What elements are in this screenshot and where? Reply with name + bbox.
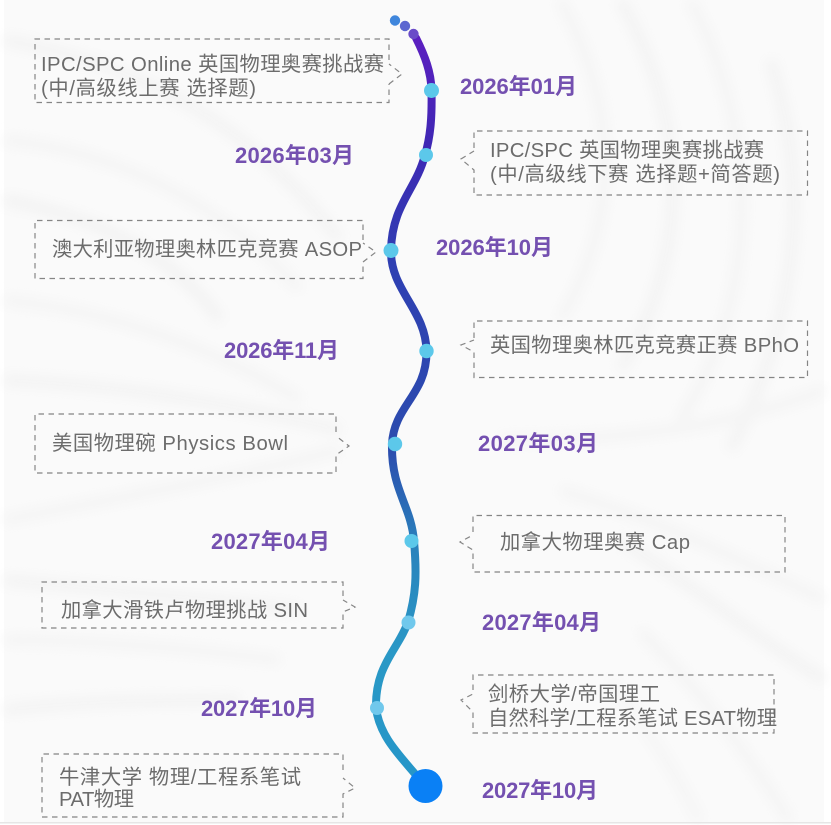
date: 2026年10月: 2026年10月	[436, 235, 553, 260]
date: 2027年03月: 2027年03月	[478, 431, 598, 456]
milestone nodes	[370, 83, 439, 715]
event: PAT: 牛津大学 物理/工程系笔试	[59, 766, 301, 789]
date: 2027年10月 right: 2027年10月	[482, 778, 598, 803]
event: PAT	[42, 754, 355, 817]
date: 2027年04月 left: 2027年04月	[211, 529, 330, 554]
event: SIN: 加拿大滑铁卢物理挑战 SIN	[61, 598, 308, 622]
event: IPC/SPC offline: IPC/SPC 英国物理奥赛挑战赛	[490, 139, 764, 162]
event: IPC/SPC Online: IPC/SPC Online 英国物理奥赛挑战赛	[41, 53, 384, 76]
event: Cap: 加拿大物理奥赛 Cap	[500, 530, 690, 554]
date: 2026年01月: 2026年01月	[460, 74, 577, 99]
event: IPC/SPC Online: (中/高级线上赛 选择题)	[41, 77, 256, 100]
event: IPC/SPC offline: (中/高级线下赛 选择题+简答题)	[490, 163, 780, 186]
event: ESAT	[461, 675, 777, 733]
event: BPhO	[461, 321, 808, 378]
event: Cap	[460, 516, 785, 572]
timeline spine	[370, 15, 442, 803]
event: IPC/SPC Online	[35, 39, 402, 102]
event: ESAT: 剑桥大学/帝国理工	[488, 683, 660, 706]
event: SIN	[42, 582, 355, 628]
event: ASOP	[35, 220, 376, 278]
event: ASOP: 澳大利亚物理奥林匹克竞赛 ASOP	[52, 238, 362, 261]
event: BPhO: 英国物理奥林匹克竞赛正赛 BPhO	[490, 334, 799, 357]
event: IPC/SPC offline	[461, 131, 808, 195]
start dots	[390, 15, 419, 39]
event: Physics Bowl: 美国物理碗 Physics Bowl	[52, 432, 288, 455]
date: 2026年11月: 2026年11月	[224, 338, 339, 363]
date: 2027年10月 left: 2027年10月	[201, 696, 317, 721]
date: 2026年03月: 2026年03月	[235, 143, 354, 168]
event: Physics Bowl	[35, 414, 349, 473]
end node	[408, 769, 442, 803]
date: 2027年04月 right: 2027年04月	[482, 610, 601, 635]
event: PAT: PAT物理	[59, 788, 134, 811]
event: ESAT: 自然科学/工程系笔试 ESAT物理	[488, 707, 777, 730]
